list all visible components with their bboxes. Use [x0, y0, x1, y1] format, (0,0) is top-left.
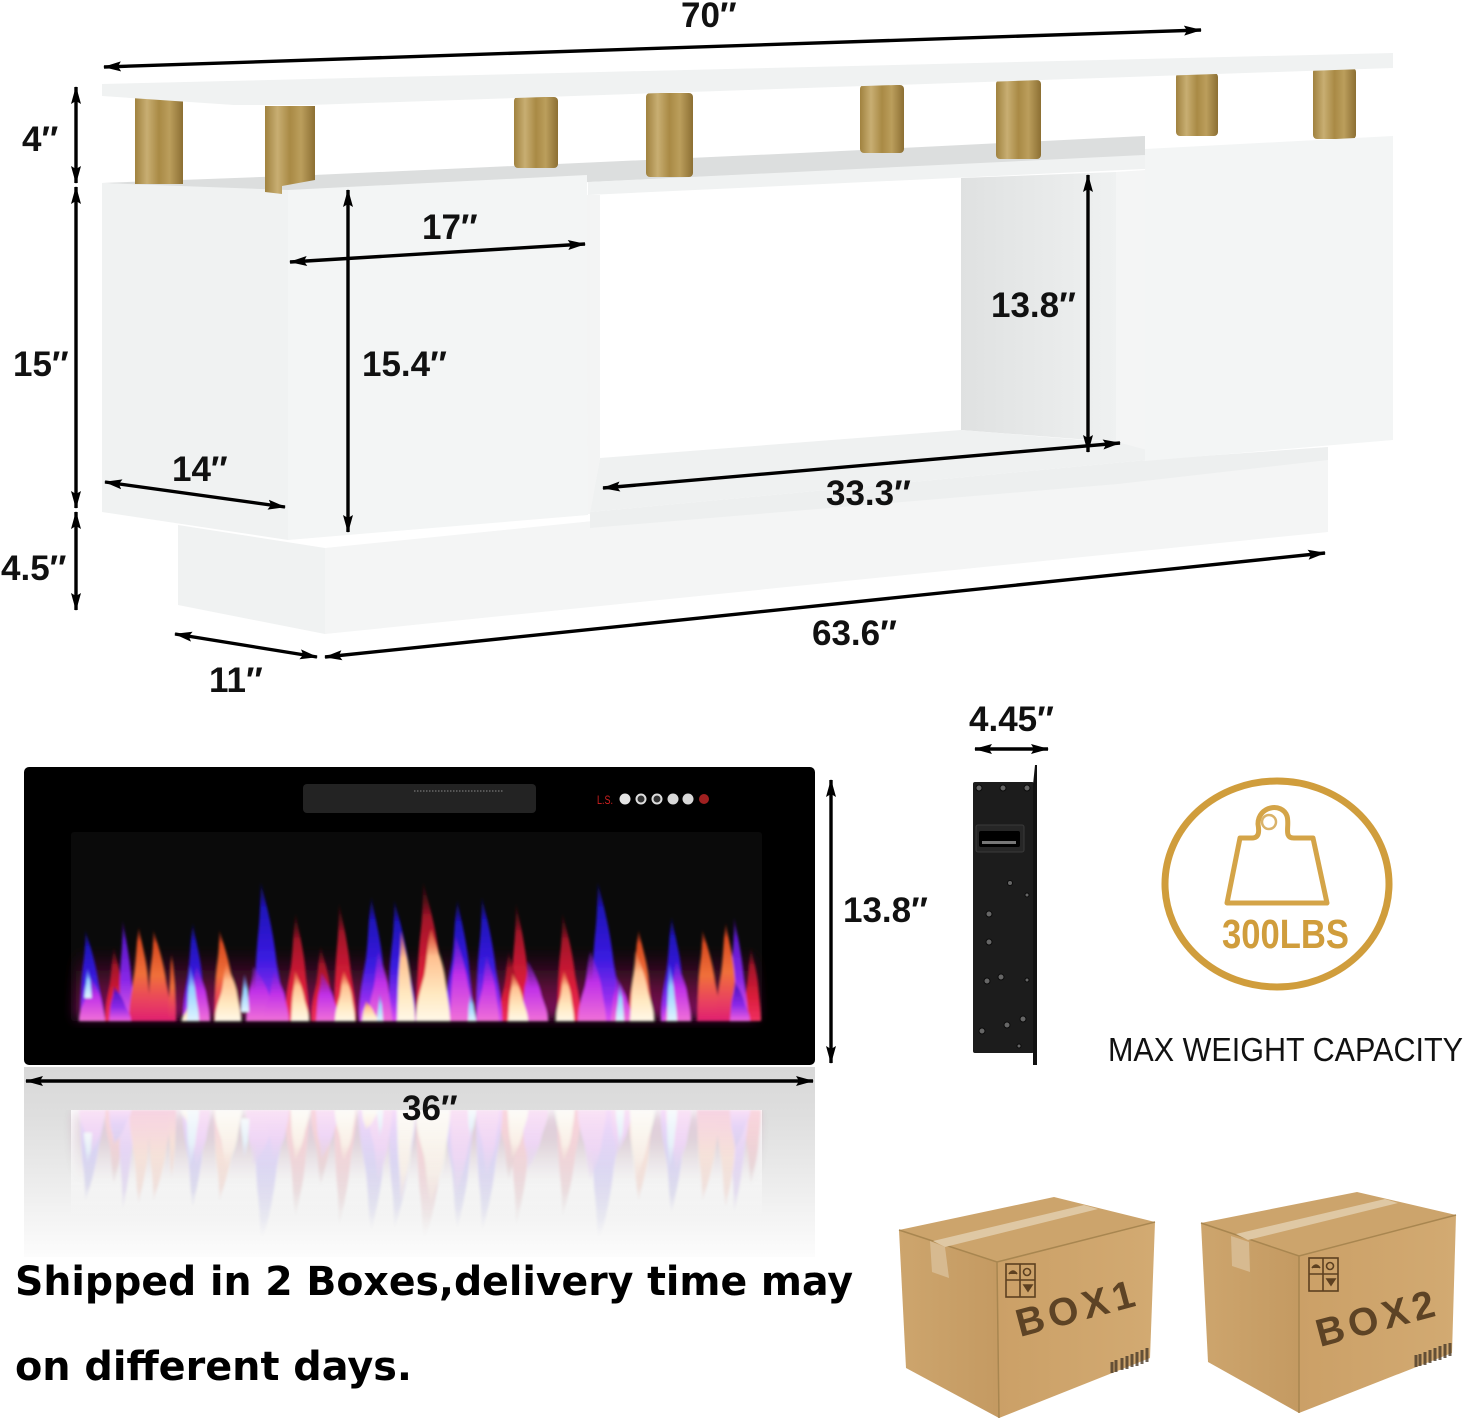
- weight ring: [1262, 815, 1276, 829]
- flames: [76, 882, 761, 1021]
- shipping note line 1: Shipped in 2 Boxes,delivery time may: [15, 1259, 853, 1305]
- dimension labels: stand: 13.8″: [991, 286, 1076, 325]
- weight glyph: [1227, 808, 1327, 903]
- golden post 3: [514, 97, 558, 168]
- cardboard box 2: [1201, 1192, 1456, 1413]
- mounting flange: [1033, 765, 1037, 1065]
- golden post 6: [996, 80, 1041, 159]
- golden post 4: [646, 93, 693, 177]
- shelf end strip: [586, 195, 600, 514]
- furniture: white TV stand: [102, 53, 1393, 634]
- golden post 5: [860, 85, 904, 153]
- box 2 label: BOX2: [1311, 1281, 1444, 1356]
- speaker slot dots: [414, 790, 504, 792]
- speaker grille: [303, 784, 536, 813]
- right cabinet: [1145, 136, 1393, 461]
- handling symbols: [1309, 1258, 1338, 1291]
- bottom shelf surface: [590, 430, 1147, 512]
- dimension labels: stand: 4.5″: [1, 549, 67, 588]
- label: fireplace width: 36″: [402, 1089, 458, 1128]
- golden post 2: [265, 106, 315, 194]
- dimension labels: stand: [1, 0, 1076, 700]
- middle shelf top surface: [102, 136, 1145, 192]
- dimension labels: stand: 17″: [422, 208, 478, 247]
- fireplace dimension arrows: [26, 749, 1048, 1081]
- tape: [933, 1205, 1098, 1247]
- middle shelf front edge: [588, 155, 1145, 195]
- shipping note line 2: on different days.: [15, 1344, 412, 1390]
- 300LBS text: 300LBS: [1222, 911, 1349, 957]
- dimension labels: stand: 11″: [209, 661, 263, 700]
- plinth base: [178, 447, 1328, 634]
- fireplace side view: [973, 765, 1037, 1065]
- label: fireplace height: 13.8″: [843, 891, 928, 930]
- control panel icons: [597, 793, 709, 807]
- left cabinet side: [102, 183, 288, 540]
- left cabinet door: [288, 175, 588, 540]
- divider column: [1116, 170, 1145, 452]
- cardboard box 1: [899, 1197, 1155, 1418]
- glass panel: [71, 832, 762, 1021]
- barcode: [1112, 1348, 1147, 1373]
- control panel icons: L.S.: [597, 793, 613, 807]
- box 1 label: BOX1: [1011, 1271, 1144, 1346]
- golden post 1: [135, 98, 183, 184]
- barcode: [1416, 1343, 1450, 1367]
- dimension labels: stand: 15″: [13, 345, 69, 384]
- back wall of the right niche: [961, 172, 1116, 442]
- fireplace floor reflection: [24, 1067, 815, 1236]
- dimension labels: stand: 63.6″: [812, 614, 897, 653]
- screws: [976, 785, 1030, 1048]
- dimension labels: stand: 33.3″: [826, 474, 911, 513]
- dimension labels: stand: 15.4″: [362, 345, 447, 384]
- handle recess: [976, 825, 1024, 852]
- label: fireplace depth: 4.45″: [969, 700, 1054, 739]
- handling symbols: [1006, 1264, 1035, 1297]
- dimension labels: stand: 14″: [172, 450, 228, 489]
- dimension labels: stand: 4″: [22, 120, 58, 159]
- electric fireplace front: [24, 767, 815, 1065]
- weight capacity icon: [1165, 781, 1389, 987]
- tape: [1236, 1199, 1398, 1240]
- golden post 7: [1176, 73, 1218, 136]
- dimension arrows: stand: [76, 30, 1325, 657]
- golden post 8: [1313, 68, 1356, 139]
- top slab: [102, 53, 1393, 105]
